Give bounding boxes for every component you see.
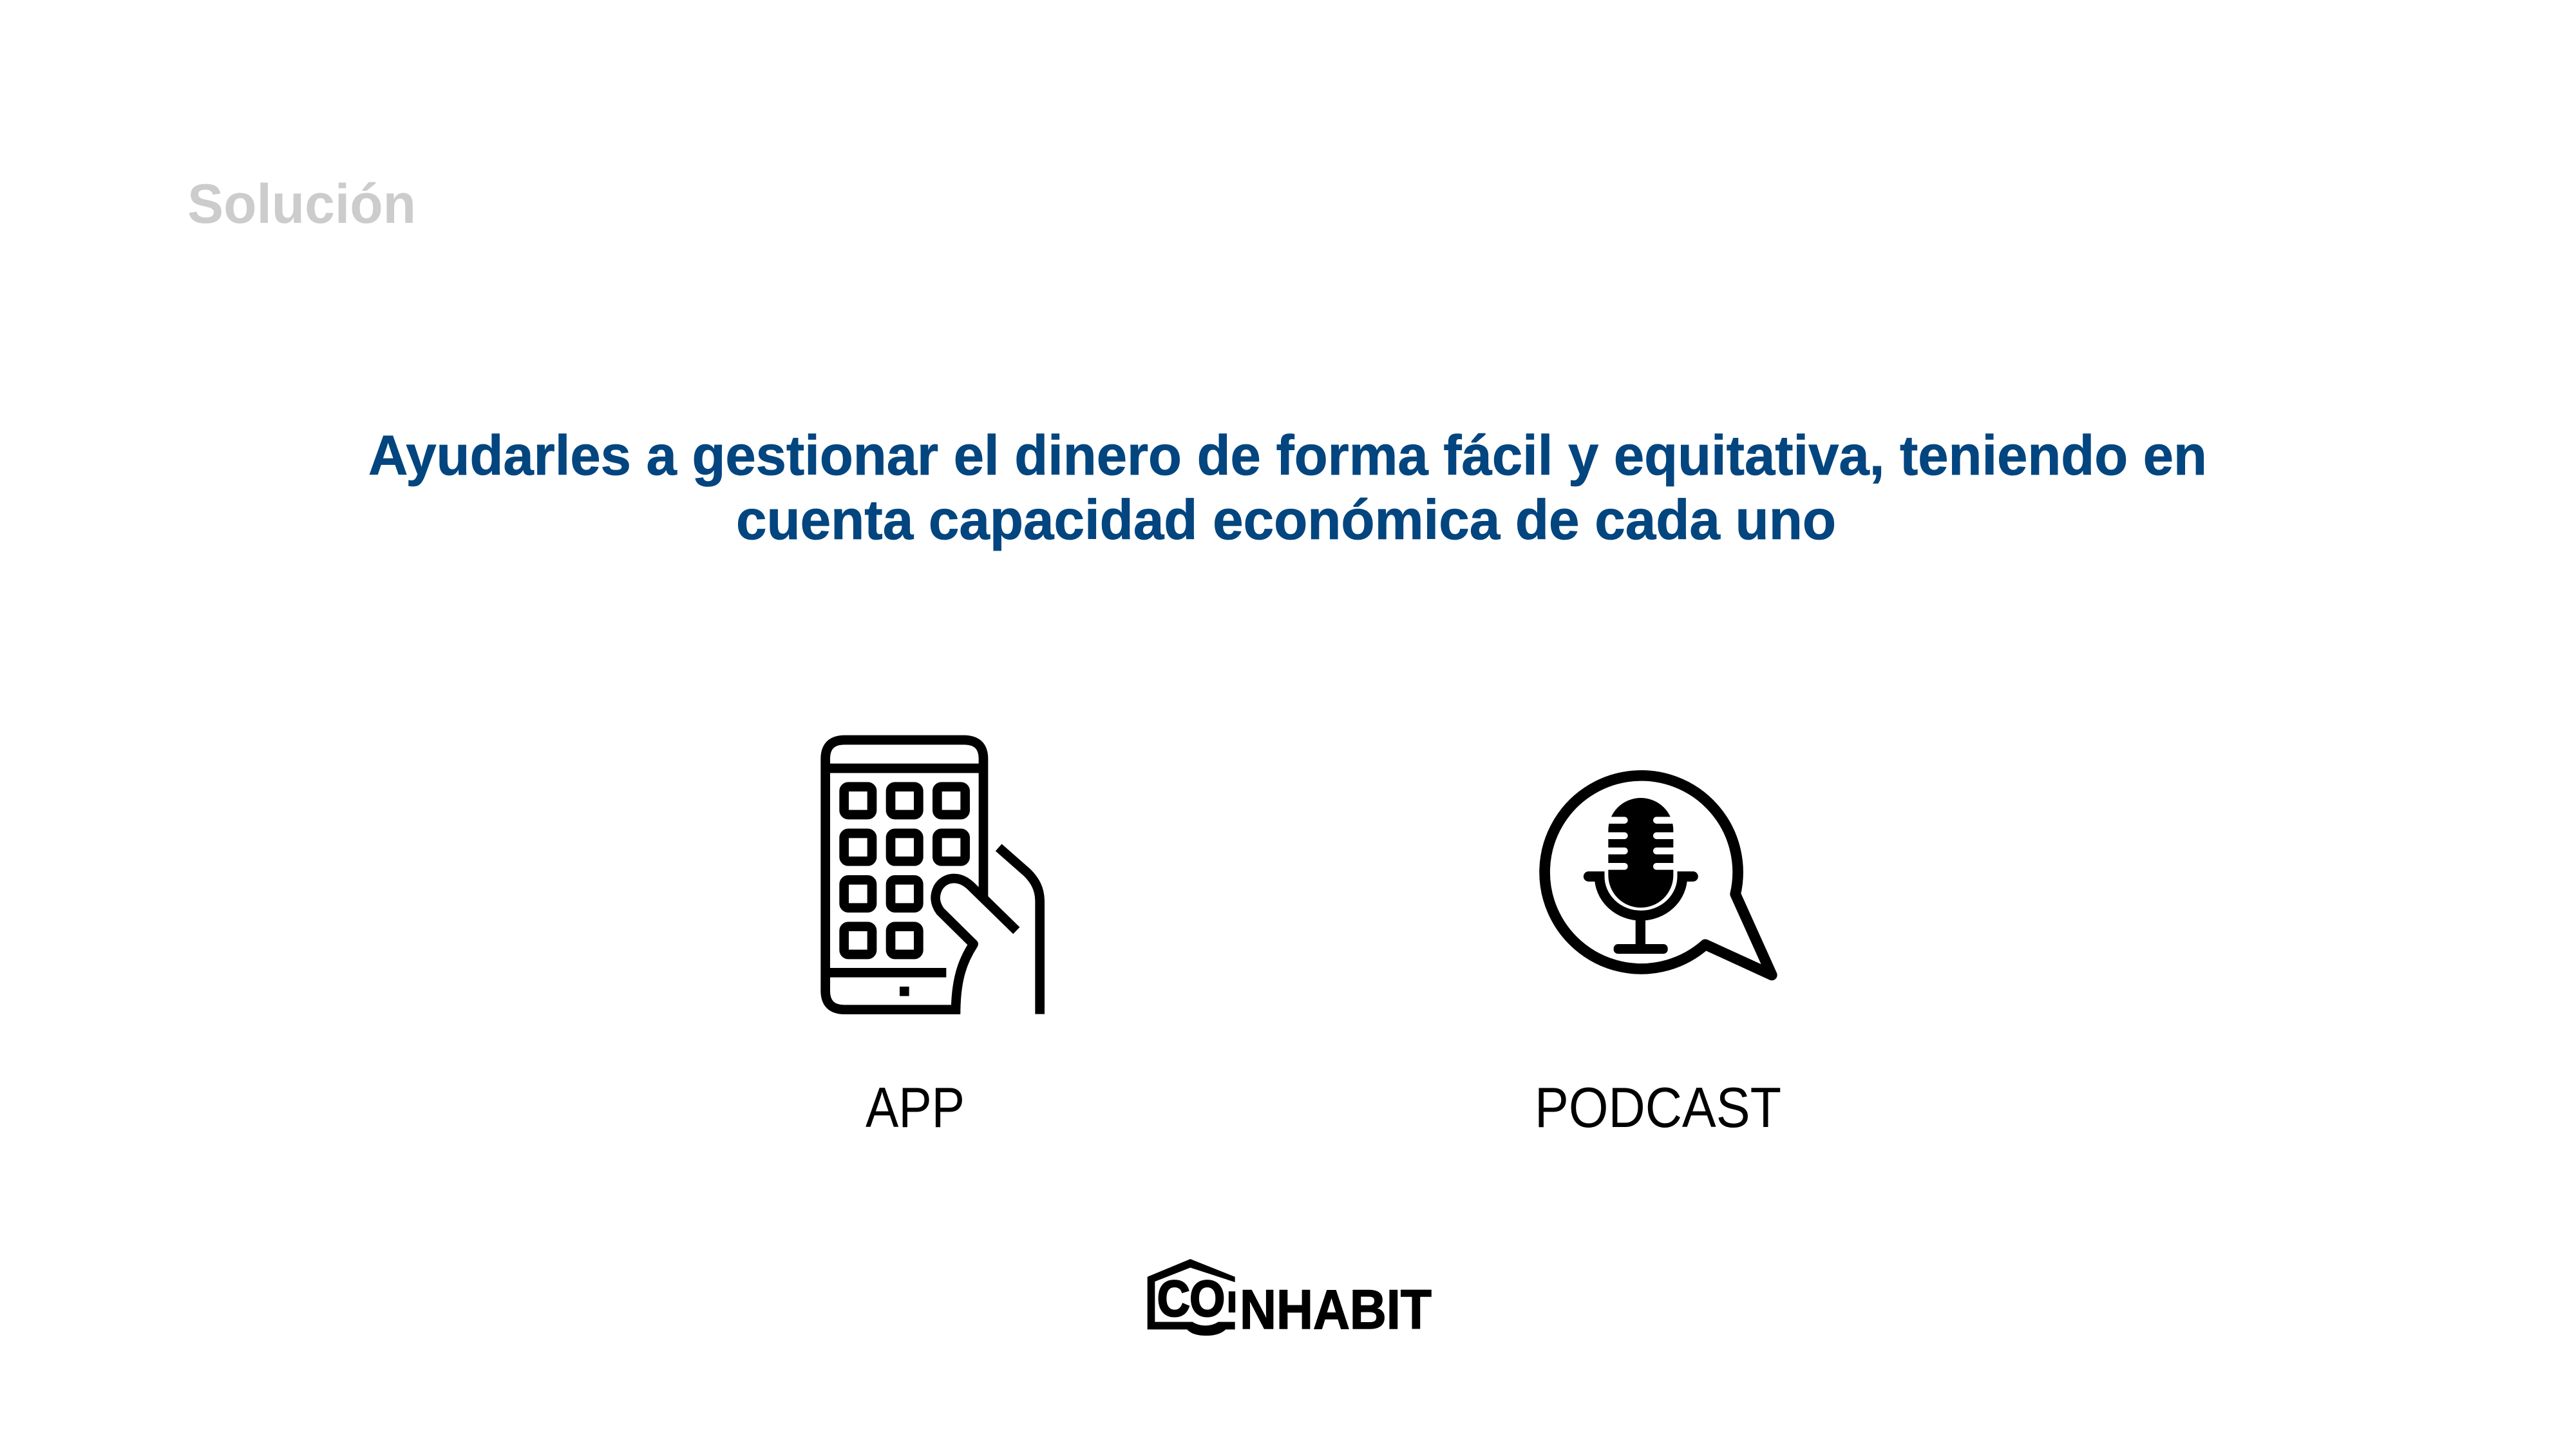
- icon: phone held in hand: [826, 740, 1040, 1014]
- icon: podcast microphone in speech bubble: [1545, 775, 1772, 975]
- label: PODCAST: PODCAST: [1535, 1075, 1781, 1139]
- logo: COINHABIT: I: [1228, 1287, 1236, 1317]
- section label: Solución: Solución: [187, 173, 416, 235]
- logo: COINHABIT: [1148, 1259, 1432, 1341]
- logo: COINHABIT: NHABIT: [1240, 1279, 1432, 1341]
- headline: cuenta capacidad económica de cada uno: [736, 489, 1836, 551]
- label: APP: APP: [866, 1075, 965, 1139]
- headline: [368, 424, 2207, 551]
- logo: COINHABIT: CO: [1157, 1270, 1225, 1327]
- headline: Ayudarles a gestionar el dinero de forma fácil y equitativa, teniendo en: [368, 424, 2207, 487]
